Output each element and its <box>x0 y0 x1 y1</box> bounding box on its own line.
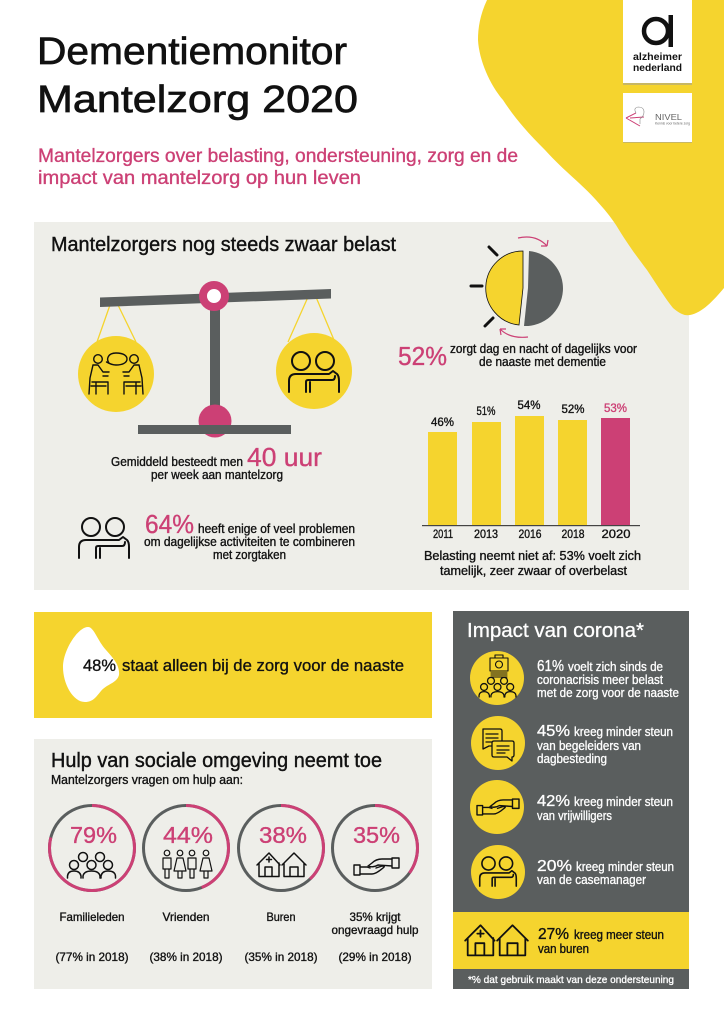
logo: Nivel: NIVEL <box>655 113 683 122</box>
text: 64%: heeft enige of veel problemen <box>198 522 355 536</box>
band: 27% meer steun <box>453 912 689 969</box>
panel: alleen bij de zorg: 48% <box>83 656 116 675</box>
text: 64%: om dagelijkse activiteiten te combineren <box>144 535 355 549</box>
ring: vrienden 44%: 44% <box>163 822 213 848</box>
ring: ongevraagd hulp 35% <box>332 806 419 964</box>
icon: two persons <box>78 517 130 559</box>
text: 52%: zorgt dag en nacht of dagelijks voor <box>450 342 637 356</box>
heading: corona: Impact van corona* <box>467 620 644 642</box>
item: 45%: van begeleiders van <box>537 739 641 753</box>
title: Mantelzorg 2020 <box>37 79 358 121</box>
scale illustration <box>78 285 352 438</box>
logo: Nivel: Kennis voor betere zorg <box>655 122 690 126</box>
heading: sociale omgeving: Mantelzorgers vragen om hulp aan: <box>51 773 243 787</box>
bar chart: 2018 <box>562 527 585 541</box>
item: 20%: van de casemanager <box>537 873 646 887</box>
text: 52%: de naaste met dementie <box>479 355 606 369</box>
logo: Nivel <box>623 93 692 143</box>
text: 40 uur <box>111 442 322 482</box>
ring: buren 38%: (35% in 2018) <box>244 950 318 964</box>
icon: conversation <box>78 336 154 412</box>
item: 61%: voelt zich sinds de <box>568 660 663 674</box>
ring: buren 38%: Buren <box>266 910 296 924</box>
ring: vrienden 44% <box>144 806 228 964</box>
item: 42%: van vrijwilligers <box>537 809 612 823</box>
bar chart: 2020 <box>602 527 631 541</box>
logo: Alzheimer Nederland: nederland <box>633 62 682 74</box>
ring: ongevraagd hulp 35%: (29% in 2018) <box>338 950 412 964</box>
ring: buren 38%: 38% <box>259 822 307 848</box>
item: 45% <box>471 716 673 770</box>
subtitle: impact van mantelzorg op hun leven <box>38 167 361 189</box>
text: 64%: met zorgtaken <box>213 548 286 562</box>
bar chart: 53% <box>604 401 627 415</box>
item: 20% <box>471 845 674 899</box>
ring: ongevraagd hulp 35%: ongevraagd hulp <box>332 923 419 937</box>
item: 61%: coronacrisis meer belast <box>537 673 663 687</box>
title <box>37 31 358 121</box>
bar chart: 52% <box>562 402 585 416</box>
ring: buren 38% <box>238 806 324 964</box>
panel: alleen bij de zorg: staat alleen bij de zorg voor de naaste <box>122 656 404 675</box>
panel: impact van corona <box>453 611 689 989</box>
bar chart: 51% <box>476 404 496 418</box>
item: 45%: 45% <box>537 723 570 740</box>
item: 42%: kreeg minder steun <box>574 795 673 809</box>
text: 64% <box>144 509 355 562</box>
chart caption <box>424 548 641 578</box>
band: 27% meer steun: 27% <box>538 926 569 943</box>
band: 27% meer steun: kreeg meer steun <box>574 928 664 942</box>
text: 40 uur: per week aan mantelzorg <box>151 468 283 482</box>
bar chart <box>422 398 640 541</box>
ring: vrienden 44%: (38% in 2018) <box>150 950 222 964</box>
band: 27% meer steun: van buren <box>538 942 589 956</box>
item: 42%: 42% <box>537 793 570 810</box>
bar chart: 2013 <box>474 527 498 541</box>
item: 42% <box>470 780 673 834</box>
item: 61%: 61% <box>537 658 564 675</box>
chart caption: tamelijk, zeer zwaar of overbelast <box>440 563 627 578</box>
title: Dementiemonitor <box>37 31 347 73</box>
bar chart: 54% <box>518 398 541 412</box>
panel: belasting <box>34 222 689 590</box>
logo: Alzheimer Nederland: alzheimer <box>633 51 682 63</box>
text: 52% <box>398 341 637 371</box>
footnote: *% dat gebruik maakt van deze ondersteuning <box>468 974 674 986</box>
ring: familieleden 79% <box>50 806 134 964</box>
item: 61% <box>470 651 679 705</box>
ring: ongevraagd hulp 35%: 35% <box>353 822 400 848</box>
bar chart: 46% <box>431 415 454 429</box>
item: 20%: 20% <box>537 858 572 875</box>
logo: Alzheimer Nederland <box>623 0 692 85</box>
subtitle <box>38 145 518 189</box>
item: 45%: dagbesteding <box>537 752 607 766</box>
item: 20%: kreeg minder steun <box>576 860 674 874</box>
panel: hulp van sociale omgeving <box>34 739 432 989</box>
ring: ongevraagd hulp 35%: 35% krijgt <box>350 910 401 924</box>
icon: two persons <box>276 333 352 409</box>
text: 40 uur: Gemiddeld besteedt men <box>111 455 243 469</box>
ring: vrienden 44%: Vrienden <box>162 910 210 924</box>
icon: day and night pie <box>471 237 563 337</box>
heading: sociale omgeving <box>51 750 382 787</box>
item: 61%: met de zorg voor de naaste <box>537 686 679 700</box>
ring: familieleden 79%: 79% <box>70 822 117 848</box>
text: 52%: 52% <box>398 341 447 371</box>
ring: familieleden 79%: Familieleden <box>60 910 124 924</box>
chart caption: Belasting neemt niet af: 53% voelt zich <box>424 548 641 563</box>
heading: sociale omgeving: Hulp van sociale omgeving neemt toe <box>51 750 382 772</box>
bar chart: 2016 <box>518 527 542 541</box>
panel: alleen bij de zorg <box>34 612 432 718</box>
text: 40 uur: 40 uur <box>247 442 322 472</box>
subtitle: Mantelzorgers over belasting, ondersteuning, zorg en de <box>38 145 518 167</box>
text: 64%: 64% <box>145 509 194 539</box>
heading: belasting: Mantelzorgers nog steeds zwaar belast <box>51 234 396 256</box>
item: 45%: kreeg minder steun <box>574 725 673 739</box>
bar chart: 2011 <box>433 527 453 541</box>
ring: familieleden 79%: (77% in 2018) <box>56 950 128 964</box>
decorative yellow blob <box>478 0 724 315</box>
